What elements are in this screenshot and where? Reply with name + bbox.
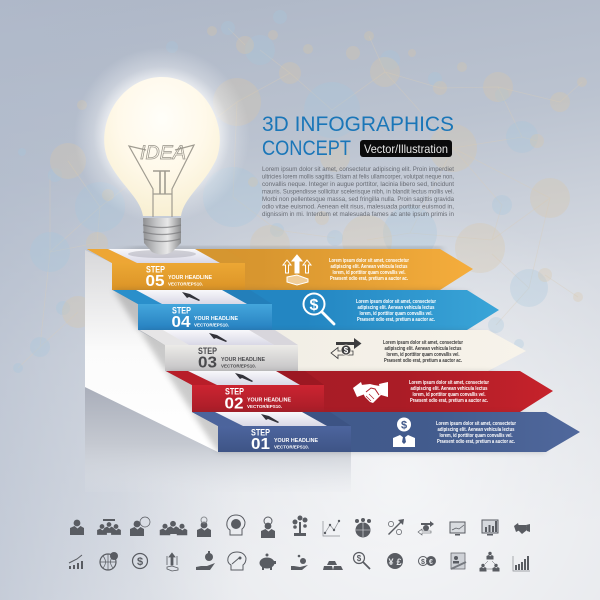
icon row 2 xyxy=(69,551,530,572)
text block: step 04 xyxy=(356,299,437,323)
icon: money plant xyxy=(292,516,308,536)
text block: step 03: Lorem ipsum dolor sit amet, consectetur xyxy=(383,340,464,346)
text block: step 02: Praesent odio erat, pretium a auctor ac. xyxy=(410,398,488,404)
badge: Vector/Illustration: Vector/Illustration xyxy=(364,142,448,156)
arrow between steps xyxy=(209,333,227,342)
icon: gold bars xyxy=(323,561,343,570)
step 01: YOUR HEADLINE xyxy=(274,438,318,444)
icon: rising arrow with coins xyxy=(388,519,404,535)
step 04: 04 xyxy=(172,314,191,331)
text block: step 02: Lorem ipsum dolor sit amet, consectetur xyxy=(409,380,490,386)
step 04: YOUR HEADLINE xyxy=(194,316,238,322)
text block: step 01: adipiscing elit. Aenean vehicula lectus xyxy=(438,427,514,433)
text block: step 04: adipiscing elit. Aenean vehicula lectus xyxy=(358,305,434,311)
icon: globe with dollar xyxy=(100,552,118,570)
title xyxy=(262,112,454,160)
icon: businessman: $ xyxy=(401,420,407,432)
icon: monitor line chart xyxy=(450,522,465,536)
icon: group xyxy=(160,521,187,535)
step 05 xyxy=(87,247,473,290)
icon: handshake xyxy=(353,382,388,403)
text block: step 01: Lorem ipsum dolor sit amet, consectetur xyxy=(436,421,517,427)
text block: step 03: adipiscing elit. Aenean vehicula lectus xyxy=(384,346,462,352)
text block: step 05: Praesent odio erat, pretium a auctor ac. xyxy=(330,276,408,282)
icon: growth bar chart xyxy=(513,556,530,571)
icon: network of people xyxy=(480,552,500,572)
icon: exchange arrows: $ xyxy=(344,346,349,355)
step 04 xyxy=(113,290,499,331)
body text xyxy=(262,166,454,218)
step 02: 02 xyxy=(224,396,244,412)
text block: step 02: adipiscing elit. Aenean vehicula lectus xyxy=(410,386,488,392)
icon: exchange arrows xyxy=(331,338,362,358)
step 01: VECTOR/EPS10. xyxy=(274,444,309,450)
arrow between steps xyxy=(182,292,200,301)
arrow between steps xyxy=(261,414,279,423)
filament word IDEA: IDEA xyxy=(140,143,186,164)
icon: dollar cycle: $ xyxy=(137,556,143,568)
step 01 xyxy=(192,412,580,453)
icon: scatter chart xyxy=(323,520,340,536)
icon: dollar euro exchange xyxy=(418,556,436,566)
icon: team with label xyxy=(97,519,121,535)
text block: step 04: Lorem ipsum dolor sit amet, consectetur xyxy=(356,299,437,305)
title: CONCEPT xyxy=(262,136,351,160)
step 05: STEP xyxy=(146,264,165,274)
text block: step 05 xyxy=(329,258,410,282)
icon: exchange arrows small xyxy=(418,521,434,535)
body text: ultricies lorem mollis sagittis. Etiam at felis ullamcorper, volutpat neque non, xyxy=(262,174,454,180)
background molecular network xyxy=(13,10,587,373)
step 01: 01 xyxy=(251,436,270,453)
text block: step 01 xyxy=(436,421,517,445)
text block: step 05: lorem, id porttitor quam convallis vel. xyxy=(332,270,406,276)
text block: step 05: adipiscing elit. Aenean vehicula lectus xyxy=(330,264,408,270)
text block: step 02 xyxy=(409,380,490,404)
step 02 xyxy=(166,371,553,412)
text block: step 02: lorem, id porttitor quam convallis vel. xyxy=(412,392,486,398)
icon: dollar businessman xyxy=(70,520,84,535)
icon: person with clock xyxy=(130,517,150,536)
icon: magnifier with dollar xyxy=(304,294,334,324)
icon: head with key xyxy=(228,552,246,570)
text block: step 04: Praesent odio erat, pretium a auctor ac. xyxy=(357,317,435,323)
step 03 xyxy=(140,330,526,372)
step 05: 05 xyxy=(146,273,165,290)
body text: dignissim in mi. Interdum et malesuada fames ac ante ipsum primis in xyxy=(262,211,454,218)
text block: step 03: Praesent odio erat, pretium a auctor ac. xyxy=(384,358,462,364)
icon: team on globe xyxy=(355,518,371,538)
icon: arrows on money small xyxy=(167,553,178,571)
staircase floor shadow xyxy=(85,387,351,492)
title: 3D INFOGRAPHICS xyxy=(262,112,454,136)
icon: dollar euro exchange: € xyxy=(429,559,433,566)
staircase white wall xyxy=(85,250,218,452)
step 03: YOUR HEADLINE xyxy=(221,357,265,363)
icon: piggy bank xyxy=(260,554,276,570)
filament xyxy=(129,145,194,217)
icon: small handshake xyxy=(514,523,530,534)
step 02: VECTOR/EPS10. xyxy=(247,404,282,409)
icon: magnifier dollar small xyxy=(354,552,370,569)
body text: Lorem ipsum dolor sit amet, consectetur adipiscing elit. Proin imperdiet xyxy=(262,166,454,173)
text block: step 01: lorem, id porttitor quam convallis vel. xyxy=(440,433,513,439)
text block: step 03: lorem, id porttitor quam convallis vel. xyxy=(386,352,460,358)
icon: businessman xyxy=(393,418,415,447)
body text: convallis neque. Integer in augue porttitor, lacinia libero sed, tincidunt xyxy=(262,181,454,188)
icon: certificate xyxy=(451,553,466,569)
icon: monitor bar chart xyxy=(482,520,498,536)
step 03: VECTOR/EPS10. xyxy=(221,364,256,368)
icon: hand with money bag xyxy=(196,551,215,570)
icon: growth arrows on money xyxy=(283,255,311,285)
text block: step 01: Praesent odio erat, pretium a auctor ac. xyxy=(437,439,515,445)
bulb glow xyxy=(74,47,250,223)
light bulb xyxy=(104,77,220,258)
step 02: STEP xyxy=(225,386,244,396)
step 02: YOUR HEADLINE xyxy=(247,398,291,404)
icon: yen and pound coin: £ xyxy=(396,557,402,567)
icon: magnifier dollar small: $ xyxy=(357,554,362,563)
icon: person with target xyxy=(261,517,275,538)
step 03: 03 xyxy=(198,354,217,372)
step 01: STEP xyxy=(251,428,270,438)
step 04: VECTOR/EPS10. xyxy=(194,322,229,328)
icon: yen and pound coin xyxy=(387,553,403,569)
icon: dollar euro exchange: $ xyxy=(421,559,425,566)
body text: Morbi non pellentesque massa, sed fringilla nulla. Proin sagittis gravida xyxy=(262,196,454,203)
icon: dollar cycle xyxy=(132,554,148,568)
icon: hand with coins xyxy=(291,555,308,570)
step 05: VECTOR/EPS10. xyxy=(168,282,203,286)
body text: odio vitae euismod. Aenean elit risus, malesuada porttitor euismod in, xyxy=(262,204,454,210)
step 04: STEP xyxy=(172,306,191,316)
text block: step 03 xyxy=(383,340,464,364)
icon: idea person xyxy=(197,517,211,537)
icon: head with gear xyxy=(227,515,245,535)
body text: mauris. Suspendisse sollicitur scelerisque nibh, in blandit lectus mollis vel. xyxy=(262,188,454,196)
icon: magnifier with dollar: $ xyxy=(310,297,319,314)
icon row 1 xyxy=(70,515,530,538)
arrow between steps xyxy=(235,373,253,382)
text block: step 05: Lorem ipsum dolor sit amet, consectetur xyxy=(329,258,410,264)
text block: step 04: lorem, id porttitor quam convallis vel. xyxy=(360,311,433,317)
step 05: YOUR HEADLINE xyxy=(168,275,212,281)
icon: yen and pound coin: ¥ xyxy=(388,557,394,567)
step 03: STEP xyxy=(198,346,217,356)
icon: rising bars with arrow xyxy=(69,555,83,569)
bulb screw base xyxy=(143,218,181,254)
